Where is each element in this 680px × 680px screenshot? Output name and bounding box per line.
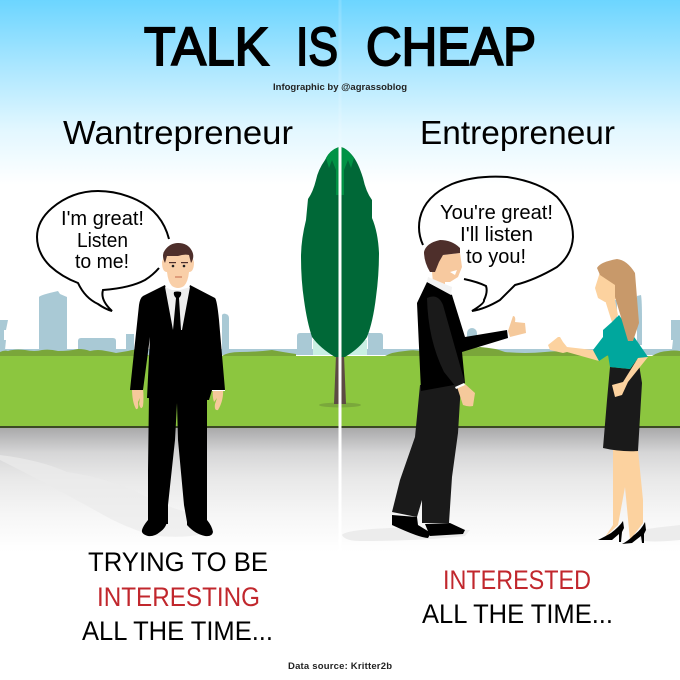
hand at side [457, 384, 475, 406]
reaching arm [548, 337, 599, 361]
caption: left [82, 547, 273, 646]
tie [173, 292, 181, 330]
background: grass [0, 356, 680, 426]
background: sky [0, 0, 680, 185]
figure: entrepreneur man [392, 240, 526, 538]
figure: woman [548, 259, 648, 544]
skirt [603, 358, 642, 451]
caption: left: ALL THE TIME... [82, 616, 273, 646]
shadow: left figure [0, 455, 203, 537]
eyes and eyebrows [169, 262, 188, 267]
shoes [142, 520, 167, 536]
heading: Wantrepreneur: Wantrepreneur [63, 114, 293, 151]
front leg [620, 450, 643, 540]
title: CHEAP [366, 17, 536, 77]
caption: left: TRYING TO BE [88, 547, 268, 577]
data source: Data source: Kritter2b [288, 661, 392, 672]
arm [427, 297, 465, 387]
trousers [392, 383, 461, 523]
title: IS [296, 17, 338, 77]
speech bubble: left [37, 191, 169, 311]
trousers [148, 395, 207, 524]
heading: Entrepreneur: Entrepreneur [420, 114, 615, 151]
collar [427, 277, 452, 295]
centre divider [338, 0, 342, 552]
back leg [605, 450, 630, 537]
figure: wantrepreneur man [130, 243, 225, 536]
thumbs-up hand [508, 316, 526, 337]
caption: right: ALL THE TIME... [422, 599, 613, 629]
background: ground [0, 426, 680, 552]
speech bubble: right: I'll listen [460, 224, 533, 246]
caption: left: INTERESTING [97, 582, 260, 612]
face [162, 250, 194, 288]
tree [301, 147, 379, 408]
shoes [392, 515, 431, 538]
neck [605, 300, 618, 322]
title: TALK [144, 17, 269, 77]
mouth [175, 276, 182, 278]
shadow: right figure shoes [342, 525, 680, 542]
speech bubble: right [419, 177, 573, 311]
speech bubble: left: to me! [75, 251, 129, 273]
jacket [417, 282, 508, 391]
title [144, 17, 536, 77]
caption: right [422, 565, 613, 629]
neck and face [432, 253, 462, 288]
speech bubble: left: Listen [77, 230, 128, 252]
caption: right: INTERESTED [443, 565, 591, 595]
shirt cuff [455, 383, 465, 389]
face [595, 272, 617, 302]
background: city skyline [0, 291, 680, 355]
bubble text: I'm great! [61, 208, 144, 230]
shoes [598, 521, 624, 542]
shirt cuff [212, 389, 225, 391]
jacket [130, 285, 225, 400]
hair [597, 259, 639, 341]
tree trunk [334, 355, 346, 404]
hand on hip arm [612, 357, 648, 397]
tree shadow [319, 402, 361, 408]
speech bubble: right: to you! [466, 246, 526, 268]
hair [163, 243, 193, 263]
head [162, 243, 194, 288]
hair [424, 240, 460, 272]
tree canopy [301, 147, 379, 357]
blouse [593, 315, 648, 369]
bubble text: You're great! [440, 202, 553, 224]
hands [132, 388, 144, 409]
subtitle: Infographic by @agrassoblog [273, 82, 407, 93]
shirt [165, 287, 190, 330]
background: hedges [0, 347, 680, 356]
tree top highlight [326, 147, 354, 195]
smile [450, 270, 457, 275]
background: mint haze behind tree [313, 340, 367, 355]
